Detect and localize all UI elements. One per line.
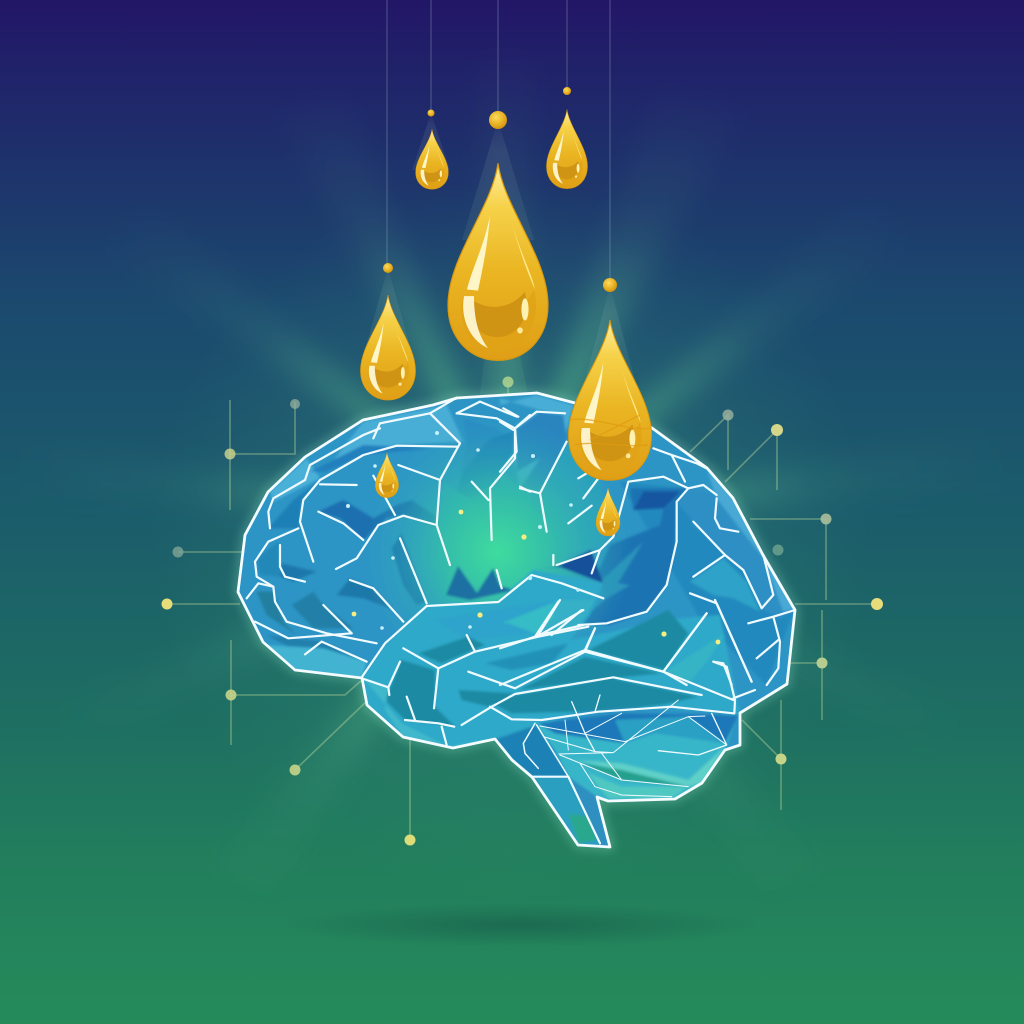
top left drop	[416, 129, 448, 189]
large right drop	[568, 320, 652, 480]
small drop on brain right	[596, 488, 620, 536]
large center drop	[448, 163, 548, 360]
right hemisphere facets	[500, 395, 795, 685]
floor shadow	[280, 903, 760, 947]
hanging threads	[387, 0, 610, 278]
cerebellum	[535, 713, 738, 801]
brain outline	[238, 393, 795, 847]
dark triangles	[446, 566, 515, 600]
temporal lobe facets	[362, 570, 740, 748]
top right drop	[546, 110, 588, 189]
left hemisphere facets	[257, 405, 530, 678]
brain glow halo	[238, 393, 795, 847]
brain fold lines: right	[500, 408, 795, 685]
left drop	[360, 295, 416, 400]
circuit network: left	[167, 383, 508, 840]
brain	[220, 380, 810, 860]
circuit network: right	[690, 415, 877, 810]
light rays	[20, 60, 1005, 895]
circuit nodes	[162, 376, 883, 846]
temporal lobe edge and lower fold lines	[362, 575, 755, 843]
sparkles	[352, 510, 720, 644]
brain fold lines: left	[247, 398, 530, 662]
small gold beads	[383, 87, 617, 292]
green core glow	[380, 434, 620, 624]
small drop on brain left	[375, 453, 399, 498]
light cones below beads	[362, 113, 640, 400]
central glow	[150, 180, 870, 900]
brain facets	[240, 394, 794, 846]
